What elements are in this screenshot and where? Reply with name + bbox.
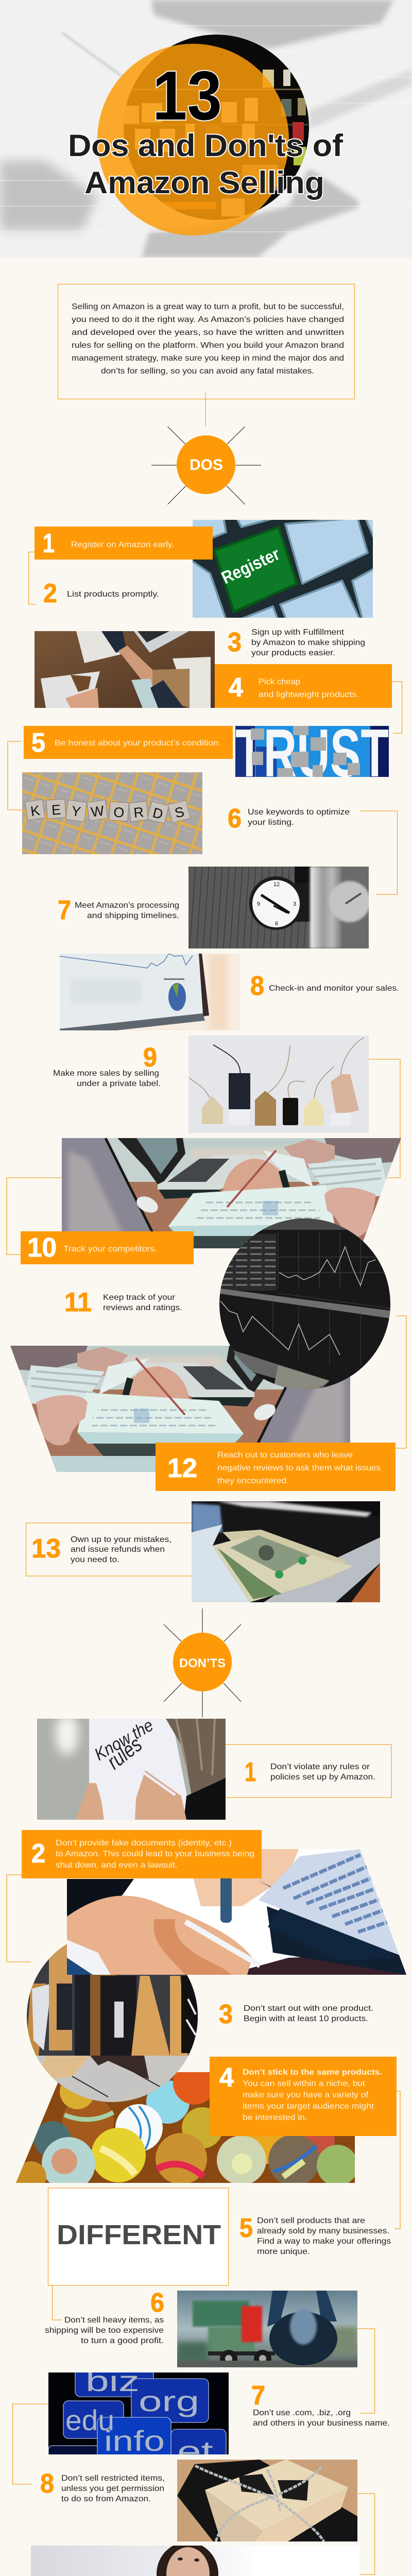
photo: keywords tiles: S [173,804,186,821]
title [68,57,344,200]
photo: scared woman [31,2546,359,2576]
item 5 bar: Be honest about your product’s condition. [55,739,221,748]
connector [392,682,402,733]
photo: register key: Register [218,544,283,588]
don't 8: Don’t sell restricted items, [61,2474,165,2483]
photo: shopping bags circle [27,1944,198,2102]
don't 3: Don’t start out with one product. [244,2004,373,2013]
photo: know the rules: rules [102,1732,146,1774]
photo: money on laptop [192,1501,380,1602]
don't 4 bar: items your target audience might [243,2102,374,2111]
item 10 bar [21,1231,194,1264]
photo: keywords tiles: K [29,803,41,819]
section badge: DOS: DOS [190,456,223,473]
item 10 bar: Track your competitors. [63,1245,157,1253]
item 9: under a private label. [77,1079,161,1088]
don't 6: 6 [150,2288,164,2318]
photo: clock: 12 [273,882,280,888]
don't 5: 5 [239,2213,253,2243]
panel: introduction [58,284,354,399]
item 3: Sign up with Fulfillment [251,628,345,637]
item 1 bar [35,527,213,560]
item 2: List products promptly. [67,590,159,599]
item 6 [228,804,350,834]
item 13: Own up to your mistakes, [71,1535,171,1544]
title: Dos and Don'ts of [68,128,344,163]
item 11: 11 [64,1287,92,1317]
item 11: reviews and ratings. [103,1303,182,1312]
photo: clock [188,867,369,948]
item 1 bar: 1 [43,529,55,558]
panel: introduction: you need to do it the right way. As Amazon’s policies have changed [72,315,344,324]
don't 6: Don’t sell heavy items, as [64,2316,164,2325]
photo: keywords tiles: E [51,802,61,818]
connector [357,2494,375,2574]
connector [7,1875,31,1962]
don't 1: policies set up by Amazon. [270,1773,375,1782]
don't 5: Don’t sell products that are [257,2216,365,2225]
don't 8: unless you get permission [61,2484,164,2493]
don't 2 bar: 2 [31,1839,45,1869]
photo: keywords tiles: D [151,805,165,822]
don't 1 [226,1744,391,1798]
section badge: DOS [151,427,261,504]
section badge: DON'TS: DON’TS [179,1656,226,1670]
don't 5: Find a way to make your offerings [257,2237,391,2246]
item 4 bar: and lightweight products. [259,690,359,699]
bookshop photo circle [121,35,312,220]
don't 1: 1 [245,1757,256,1787]
don't 5: more unique. [257,2247,310,2256]
connector [8,741,22,810]
item 12 bar: Reach out to customers who leave [217,1451,353,1460]
item 13 [31,1534,171,1564]
connector [7,1178,62,1255]
item 11 [64,1287,182,1317]
item 10 bar: 10 [27,1233,57,1263]
don't 5 [239,2213,391,2256]
photo: pencil and notes, mirrored [5,1346,350,1472]
don't 1: Don’t violate any rules or [270,1762,370,1771]
item 1 bar: Register on Amazon early. [71,540,174,549]
photo: clock: 6 [275,921,278,927]
item 12 bar: negative reviews to ask them what issues [217,1464,381,1472]
item 6: your listing. [248,818,294,827]
item 2 [43,579,159,608]
don't 3: 3 [219,1999,233,2029]
item 2: 2 [43,579,57,608]
photo: know the rules [37,1716,226,1820]
item 9: Make more sales by selling [53,1069,159,1078]
panel: introduction: management strategy, make sure you keep in mind the major dos and [72,354,344,363]
photo: register key [193,520,373,618]
item 4 bar [215,664,392,708]
title: Amazon Selling [84,165,324,200]
don't 7 [251,2381,390,2428]
photo: keywords tiles [22,772,202,854]
photo: keywords tiles: O [113,804,125,821]
item 12 bar [156,1443,396,1491]
don't 2 bar: Don’t provide fake documents (identity, etc.) [56,1839,232,1848]
photo: clock: 3 [293,901,296,907]
item 8: 8 [250,971,264,1001]
photo: chained book [177,2460,357,2541]
item 9: 9 [143,1043,157,1073]
connector [360,811,398,894]
connector [369,1059,400,1178]
item 4 bar: Pick cheap [259,677,300,686]
don't 2 bar [22,1830,262,1878]
don't 8 [40,2469,165,2503]
item 13: 13 [31,1534,61,1564]
photo: marbles [16,2072,355,2183]
don't 5: already sold by many businesses. [257,2227,389,2235]
photo: domain names [48,2365,229,2467]
item 12 bar: they encountered. [217,1477,289,1485]
item 7 [58,895,179,925]
photo: domain names: info [104,2425,165,2457]
photo: domain names: org [139,2385,199,2417]
don't 4 bar: make sure you have a variety of [243,2091,369,2099]
item 3: 3 [228,628,242,657]
photo: domain names: et [177,2435,214,2467]
photo: sales dashboard [60,954,240,1030]
photo: keywords tiles: Y [71,803,82,820]
don't 2 bar: to Amazon. This could lead to your business being [56,1850,254,1858]
item 9 [53,1043,161,1088]
don't 3: Begin with at least 10 products. [244,2014,368,2023]
photo: keywords tiles: R [133,804,144,821]
don't 4 bar: 4 [219,2063,234,2093]
connector [396,1316,406,1448]
item 5 bar: 5 [31,728,45,758]
don't 6 [45,2288,164,2345]
connector [394,2091,400,2229]
item 7: and shipping timelines. [87,911,179,920]
item 3: by Amazon to make shipping [251,638,365,647]
photo: clock: 9 [257,901,260,907]
photo: domain names: biz [85,2365,140,2397]
photo: domain names: edu [65,2404,114,2436]
panel: header [0,0,412,258]
item 6: Use keywords to optimize [248,808,350,817]
don't 8: 8 [40,2469,54,2499]
item 8: Check-in and monitor your sales. [269,984,399,993]
don't 6: to turn a good profit. [81,2336,164,2345]
panel: introduction: rules for selling on the platform. When you build your Amazon brand [72,341,344,350]
connector [29,552,36,604]
panel: introduction: Selling on Amazon is a great way to turn a profit, but to be successful, [72,302,344,311]
don't 6: shipping will be too expensive [45,2326,164,2335]
item 3: your products easier. [251,649,335,657]
image: DIFFERENT word: DIFFERENT [57,2219,221,2250]
item 5 bar [24,726,233,759]
photo: handshake [35,631,215,708]
item 8 [250,971,399,1001]
don't 4 bar [210,2057,397,2136]
don't 7: and others in your business name. [253,2419,390,2428]
item 12 bar: 12 [167,1453,197,1483]
item 4 bar: 4 [229,673,243,703]
photo: pencil and notes [62,1138,401,1248]
image: DIFFERENT word [48,2188,229,2285]
item 3 [228,628,365,657]
photo: stock chart circle [216,1216,394,1394]
connector [53,2285,62,2320]
item 13: and issue refunds when [71,1545,165,1554]
photo: keywords tiles: W [90,803,105,820]
don't 3 [219,1999,373,2029]
connector box: item 13 [26,1523,192,1576]
item 11: Keep track of your [103,1293,176,1302]
photo: heavy truck and weight [177,2291,357,2367]
don't 4 bar: Don’t stick to the same products. [243,2068,382,2077]
item 7: Meet Amazon’s processing [75,901,179,910]
title: 13 [152,57,222,134]
item 6: 6 [228,804,242,834]
orange circle overlay [97,44,289,235]
photo: pen and document [67,1849,407,1975]
panel: introduction: and developed over the years, so have the written and unwritten [72,328,344,337]
item 7: 7 [58,895,71,925]
don't 7: Don’t use .com, .biz, .org [253,2409,351,2417]
don't 7: 7 [251,2381,265,2411]
connector [357,2329,375,2413]
section badge: DON'TS [164,1608,241,1717]
don't 8: to do so from Amazon. [61,2495,151,2503]
photo: price tags [188,1036,369,1133]
item 13: you need to. [71,1555,119,1564]
don't 4 bar: You can sell within a niche, but [243,2079,366,2088]
don't 4 bar: be interested in. [243,2113,307,2122]
panel: introduction: don’ts for selling, so you can avoid any fatal mistakes. [101,367,314,376]
connector [12,2404,48,2484]
don't 2 bar: shut down, and even a lawsuit. [56,1861,178,1870]
